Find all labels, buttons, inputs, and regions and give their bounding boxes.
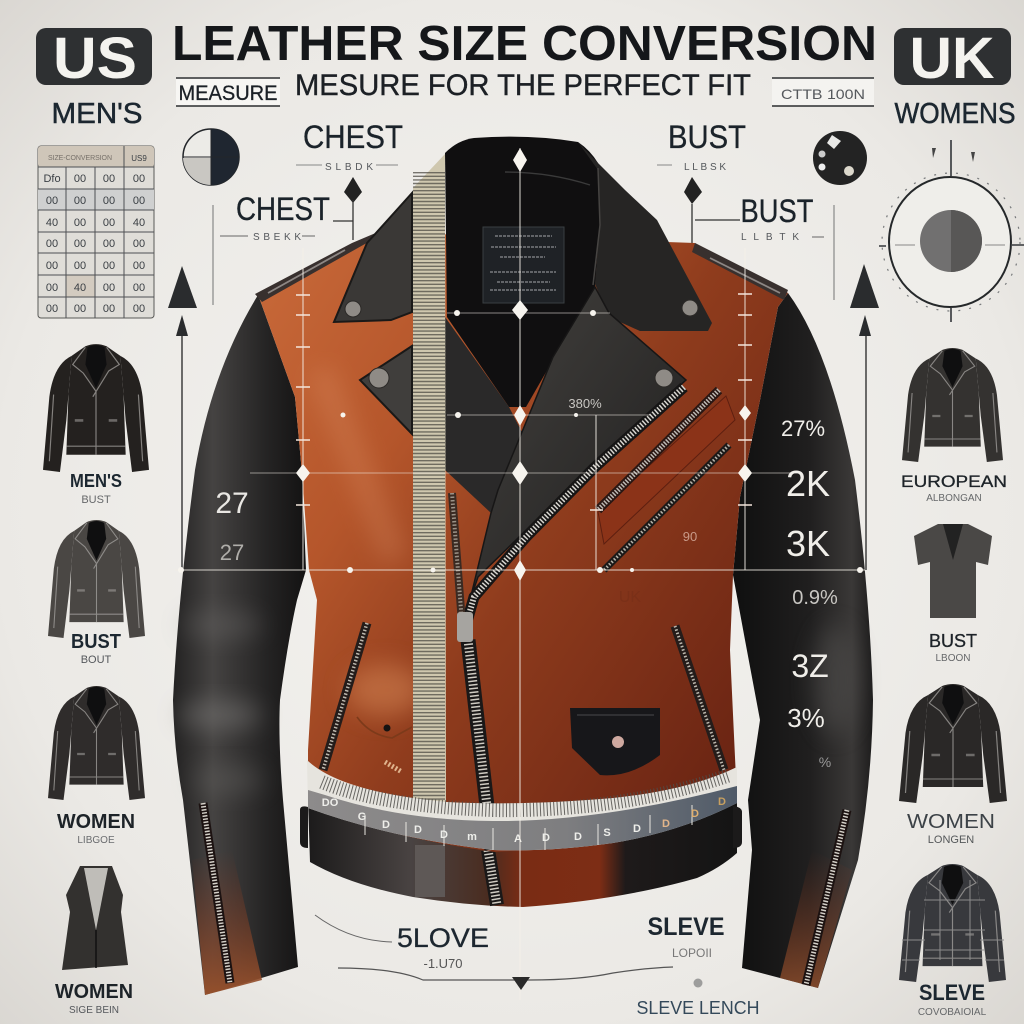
waist tape measure: D — [440, 829, 448, 841]
mini jacket: men's — [43, 344, 149, 472]
size table: 00 — [74, 238, 86, 250]
mini short-sleeve top — [914, 524, 992, 618]
subtitle: MESURE FOR THE PERFECT FIT — [295, 69, 751, 102]
text: men's bust — [70, 471, 122, 506]
mini jacket: women blazer — [48, 686, 145, 800]
badge: UK: UK — [910, 26, 995, 91]
size table: 00 — [74, 173, 86, 185]
size table: 00 — [133, 282, 145, 294]
sleeve numbers left: 27 — [215, 487, 249, 520]
size table: US9 — [131, 154, 147, 163]
size table: 00 — [133, 260, 145, 272]
arrow: left height — [168, 205, 213, 570]
right collar — [578, 142, 712, 331]
pointer: chest diamond — [333, 177, 362, 240]
sleeve numbers left: 27 — [220, 540, 244, 565]
label: men's: MEN'S — [52, 98, 142, 130]
text: european: ALBONGAN — [926, 493, 982, 504]
text: women: LIBGOE — [77, 835, 115, 846]
sleeve numbers right: 3K — [786, 523, 830, 564]
body small labels: UK — [619, 589, 641, 606]
label: bust top: LLBSK — [684, 162, 726, 173]
size table: SIZE-CONVERSION — [48, 155, 112, 162]
waist tape measure: G — [358, 811, 366, 823]
inner lining — [445, 137, 600, 407]
text: bust right — [929, 631, 977, 664]
waist tape measure: D — [662, 818, 670, 830]
body small labels: 90 — [683, 529, 697, 544]
bottom bracket arrow — [338, 967, 702, 990]
size table: 00 — [46, 238, 58, 250]
sleeve numbers right: 3Z — [791, 648, 829, 684]
waist tape measure: DO — [322, 797, 339, 809]
text: bust right: LBOON — [935, 653, 971, 664]
size table: 00 — [103, 238, 115, 250]
text: bust right: BUST — [929, 631, 977, 651]
waist tape measure: D — [718, 796, 726, 808]
size table: 40 — [46, 217, 58, 229]
size table: 00 — [133, 195, 145, 207]
snap pocket — [570, 708, 660, 775]
label: slove — [315, 915, 489, 971]
sleeve numbers right: 3% — [787, 703, 825, 733]
mini vest — [62, 866, 128, 970]
jacket — [173, 137, 873, 1000]
right sleeve — [733, 293, 873, 988]
label: chest left: SBEKK — [253, 232, 301, 243]
size table: 00 — [74, 260, 86, 272]
hem band — [300, 795, 742, 907]
sleeve numbers right: % — [819, 754, 831, 770]
size table: 00 — [46, 303, 58, 315]
badge: US: US — [53, 26, 137, 91]
size table: 00 — [103, 260, 115, 272]
pocket zippers — [323, 623, 724, 770]
waist tape measure: D — [414, 824, 422, 836]
size table: 00 — [103, 195, 115, 207]
icon: quartered circle — [183, 129, 239, 185]
size table: 40 — [133, 217, 145, 229]
size table: 00 — [103, 303, 115, 315]
text: women lower: WOMEN — [55, 981, 133, 1003]
label: sleve: LOPOII — [672, 946, 712, 960]
left collar — [334, 193, 412, 322]
chest zippers — [598, 390, 735, 570]
label: chest left: CHEST — [236, 191, 330, 227]
text: bust: BUST — [71, 631, 121, 653]
sleeve numbers right — [781, 416, 838, 770]
mini jacket: bust — [48, 520, 145, 638]
size table: 00 — [46, 260, 58, 272]
label: chest top: CHEST — [303, 119, 403, 155]
mini jacket: plaid — [899, 864, 1006, 982]
mini jacket: european — [902, 348, 1003, 462]
text: bust — [71, 631, 121, 666]
pointer: bust diamond — [684, 177, 740, 245]
label: bust right: BUST — [740, 193, 814, 229]
size table: 40 — [74, 282, 86, 294]
text: bust: BOUT — [81, 654, 112, 666]
studs — [345, 300, 698, 388]
size table: 00 — [103, 282, 115, 294]
body small labels — [568, 396, 697, 606]
left lapel — [360, 346, 412, 434]
left pocket flap — [357, 717, 412, 772]
size table: Dfo — [43, 173, 61, 185]
measure box: MEASURE — [178, 82, 278, 105]
sleeve numbers right: 0.9% — [792, 587, 838, 609]
shoulder straps — [255, 232, 788, 302]
label: chest left — [220, 191, 330, 243]
mini jacket: women right — [899, 684, 1007, 803]
text: women — [57, 811, 135, 846]
waist tape measure: A — [514, 833, 522, 845]
text: sleeve right: SLEVE — [919, 980, 985, 1005]
label: slove: 5LOVE — [397, 923, 489, 953]
label: sleve: SLEVE — [648, 913, 724, 941]
waist tape measure: D — [382, 819, 390, 831]
label: chest top — [296, 119, 403, 173]
size table: 00 — [133, 238, 145, 250]
size table: 00 — [46, 282, 58, 294]
label: bust top: BUST — [668, 119, 746, 155]
icon: dial — [879, 140, 1024, 322]
text: women right: LONGEN — [928, 834, 974, 846]
text: women right — [907, 811, 995, 846]
leather body — [260, 232, 788, 852]
label: bust right: LLBTK — [741, 232, 799, 243]
title: LEATHER SIZE CONVERSION — [172, 17, 877, 71]
center-left lapel — [445, 317, 526, 513]
right caption box — [772, 77, 874, 106]
text: european — [901, 472, 1007, 504]
size table: 00 — [74, 217, 86, 229]
badge: US — [36, 26, 152, 91]
waist tape measure — [307, 760, 737, 850]
text: sleeve right — [918, 980, 987, 1018]
size table: 00 — [103, 173, 115, 185]
label: sleeve length: SLEVE LENCH — [636, 998, 760, 1018]
text: women lower: SIGE BEIN — [69, 1005, 119, 1016]
size table — [38, 146, 154, 318]
back collar seam — [505, 172, 590, 185]
text: european: EUROPEAN — [901, 472, 1007, 491]
size table: 00 — [103, 217, 115, 229]
arrow: right height — [834, 205, 879, 570]
label: slove: -1.U70 — [423, 956, 463, 971]
text: sleeve right: COVOBAIOIAL — [918, 1007, 987, 1018]
waist tape measure: D — [542, 832, 550, 844]
waist tape measure: m — [467, 831, 477, 843]
label: sleve — [648, 913, 724, 960]
sleeve numbers left — [215, 487, 249, 565]
sleeve numbers right: 27% — [781, 416, 825, 441]
waist tape measure: D — [633, 823, 641, 835]
text: men's bust: MEN'S — [70, 471, 122, 491]
text: women: WOMEN — [57, 811, 135, 833]
right lapel — [470, 287, 686, 600]
left sleeve — [173, 295, 306, 995]
body highlights — [320, 370, 423, 716]
size table: 00 — [133, 173, 145, 185]
label: chest top: SLBDK — [325, 162, 373, 173]
size table: 00 — [133, 303, 145, 315]
text: men's bust: BUST — [81, 494, 111, 506]
body small labels: 380% — [568, 396, 602, 411]
text: women right: WOMEN — [907, 811, 995, 833]
text: women lower — [55, 981, 133, 1016]
neck tag — [483, 227, 564, 303]
waist tape measure: D — [574, 831, 582, 843]
label: bust top — [657, 119, 746, 173]
size table: 00 — [74, 195, 86, 207]
icon: black studded ball — [813, 131, 867, 185]
measuring lines — [175, 148, 865, 1000]
waist tape measure: S — [603, 827, 611, 839]
vertical tape measure — [413, 154, 446, 802]
waist tape measure: D — [691, 808, 699, 820]
sleeve numbers right: 2K — [786, 463, 830, 504]
right caption box: CTTB 100N — [781, 86, 865, 102]
size table: 00 — [46, 195, 58, 207]
size table: 00 — [74, 303, 86, 315]
main zipper — [452, 387, 684, 850]
